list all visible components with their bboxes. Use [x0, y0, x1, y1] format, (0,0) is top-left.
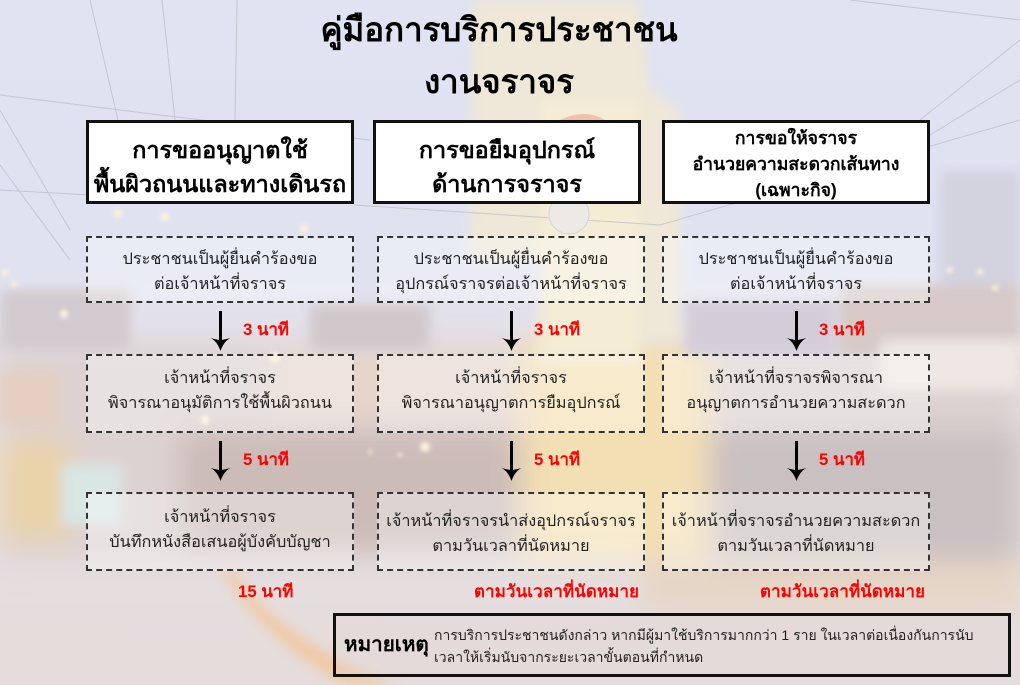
title: [320, 11, 678, 100]
column 1 header: [86, 120, 354, 204]
column 2 step 3: ตามวันเวลาที่นัดหมาย: [432, 536, 590, 554]
column 2 header: ด้านการจราจร: [432, 170, 582, 196]
column 2 header: การขอยืมอุปกรณ์: [419, 136, 595, 162]
column 1 step 1: ประชาชนเป็นผู้ยื่นคำร้องขอ: [123, 250, 317, 268]
note text: การบริการประชาชนดังกล่าว หากมีผู้มาใช้บริการมากกว่า 1 ราย ในเวลาต่อเนื่องกันการนับ: [434, 627, 974, 643]
column 1 step 2: เจ้าหน้าที่จราจร: [164, 369, 276, 387]
column 2 header: [373, 120, 641, 204]
note label: หมายเหตุ: [344, 633, 429, 656]
column 3 step 1: [662, 236, 930, 303]
column 2 step 2: พิจารณาอนุญาตการยืมอุปกรณ์: [402, 394, 620, 412]
time: 3 minutes column 2: 3 นาที: [534, 320, 580, 339]
tower clock: [549, 194, 589, 234]
arrow: column 2 step 2 to 3: [502, 441, 522, 481]
column 2 step 1: [377, 236, 645, 303]
arrow: column 1 step 1 to 2: [210, 311, 230, 351]
wires: [0, 0, 1020, 260]
note text: เวลาให้เริ่มนับจากระยะเวลาขั้นตอนที่กำหนด: [434, 649, 703, 665]
title: งานจราจร: [424, 63, 574, 100]
column 2 step 3: เจ้าหน้าที่จราจรนำส่งอุปกรณ์จราจร: [386, 512, 636, 530]
column 3 step 2: เจ้าหน้าที่จราจรพิจารณา: [709, 369, 883, 387]
time: 5 minutes column 1: 5 นาที: [243, 450, 289, 469]
column 2 step 2: เจ้าหน้าที่จราจร: [455, 369, 567, 387]
column 2 step 2: [377, 354, 645, 433]
arrow: column 2 step 1 to 2: [502, 311, 522, 351]
arrow: column 3 step 2 to 3: [786, 441, 806, 481]
column 1 step 1: ต่อเจ้าหน้าที่จราจร: [154, 274, 286, 292]
column 1 step 3: [86, 492, 354, 571]
arrow: column 3 step 1 to 2: [786, 311, 806, 351]
column 1 step 1: [86, 236, 354, 303]
column 3 header: [662, 120, 930, 204]
column 3 step 2: [662, 354, 930, 433]
time: 5 minutes column 2: 5 นาที: [534, 450, 580, 469]
arrow: column 1 step 2 to 3: [210, 441, 230, 481]
column 3 header: (เฉพาะกิจ): [755, 180, 837, 200]
column 1 step 3: เจ้าหน้าที่จราจร: [164, 508, 276, 526]
note box: [333, 613, 1011, 677]
title: คู่มือการบริการประชาชน: [320, 11, 678, 48]
column 1 step 3: บันทึกหนังสือเสนอผู้บังคับบัญชา: [109, 532, 331, 550]
column 1 step 2: [86, 354, 354, 433]
column 1 header: พื้นผิวถนนและทางเดินรถ: [94, 170, 346, 196]
time: 15 minutes column 1: 15 นาที: [238, 582, 293, 601]
time: appointment column 3: ตามวันเวลาที่นัดหมาย: [760, 582, 925, 601]
note text: [434, 626, 974, 665]
column 3 step 1: ต่อเจ้าหน้าที่จราจร: [730, 274, 862, 292]
column 3 step 3: ตามวันเวลาที่นัดหมาย: [717, 536, 875, 554]
time: 5 minutes column 3: 5 นาที: [819, 450, 865, 469]
time: 3 minutes column 3: 3 นาที: [819, 320, 865, 339]
column 2 step 1: ประชาชนเป็นผู้ยื่นคำร้องขอ: [414, 250, 608, 268]
column 1 header: การขออนุญาตใช้: [132, 136, 308, 162]
tower: [470, 0, 680, 340]
column 3 step 3: เจ้าหน้าที่จราจรอำนวยความสะดวก: [672, 512, 920, 530]
column 3 step 2: อนุญาตการอำนวยความสะดวก: [686, 394, 906, 412]
column 2 step 3: [377, 492, 645, 571]
column 3 header: การขอให้จราจร: [735, 128, 857, 148]
column 3 header: อำนวยความสะดวกเส้นทาง: [693, 154, 899, 174]
column 3 step 3: [662, 492, 930, 571]
street lights: [2, 209, 998, 457]
time: appointment column 2: ตามวันเวลาที่นัดหมาย: [474, 582, 639, 601]
column 2 step 1: อุปกรณ์จราจรต่อเจ้าหน้าที่จราจร: [395, 274, 627, 292]
column 3 step 1: ประชาชนเป็นผู้ยื่นคำร้องขอ: [699, 250, 893, 268]
time: 3 minutes column 1: 3 นาที: [243, 320, 289, 339]
column 1 step 2: พิจารณาอนุมัติการใช้พื้นผิวถนน: [108, 394, 332, 412]
